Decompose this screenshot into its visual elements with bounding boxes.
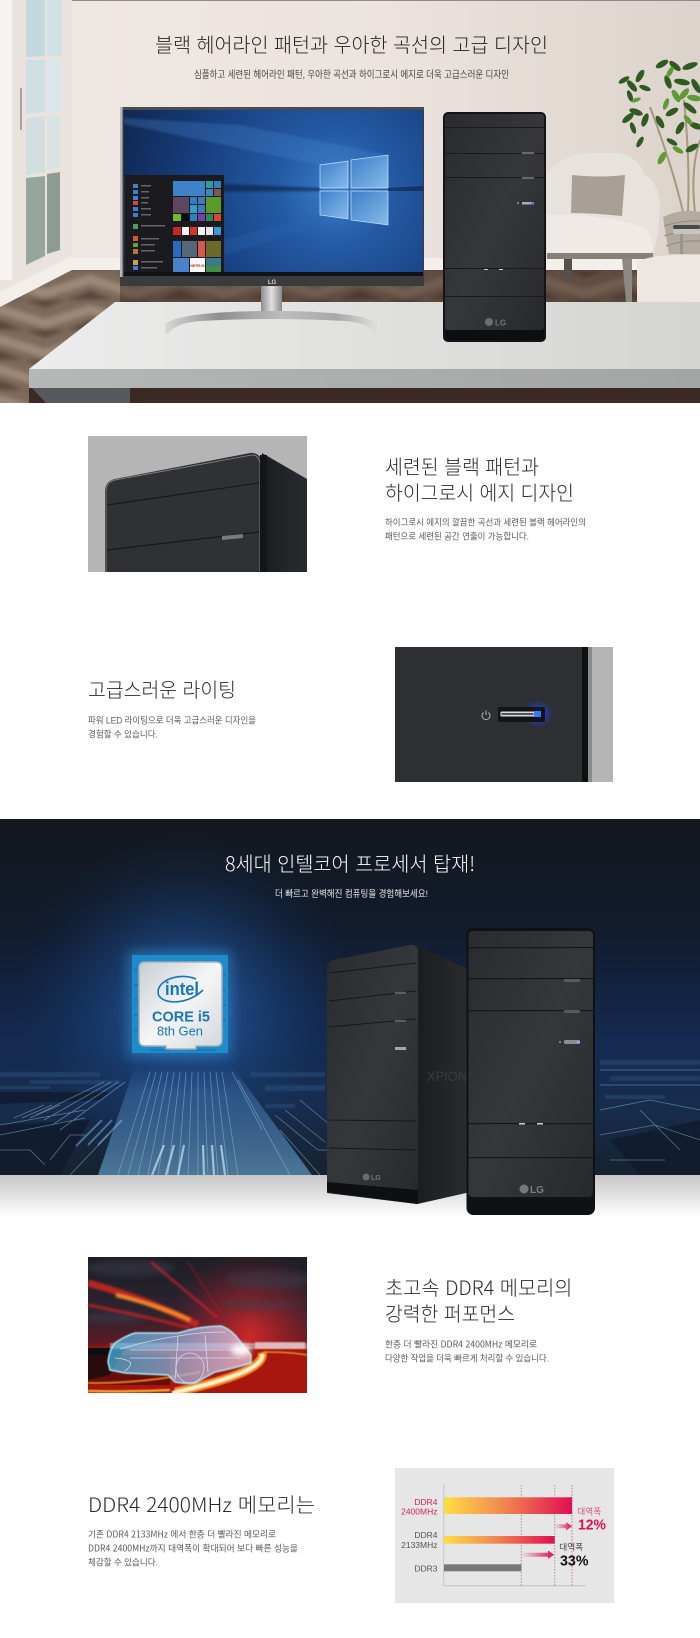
heading: DDR4 2400MHz 메모리는 xyxy=(88,1489,315,1518)
description xyxy=(88,716,256,740)
monitor screen xyxy=(124,110,424,276)
hero subtitle: 심플하고 세련된 헤어라인 패턴, 우아한 곡선과 하이그로시 에지로 더욱 고급스러운 디자인 xyxy=(194,68,509,81)
8th gen: 8th Gen xyxy=(157,1024,203,1038)
image: power LED close-up xyxy=(395,647,613,782)
panel: premium lighting xyxy=(88,647,613,782)
bar labels: 2133MHz xyxy=(401,1540,438,1550)
description: 체감할 수 있습니다. xyxy=(88,1556,158,1568)
description: 패턴으로 세련된 공간 연출이 가능합니다. xyxy=(385,530,529,542)
bar: DDR4 2133MHz xyxy=(444,1536,555,1544)
description: 기존 DDR4 2133MHz 에서 한층 더 빨라진 메모리로 xyxy=(88,1528,276,1540)
window xyxy=(0,0,72,307)
bar labels: 2400MHz xyxy=(401,1506,438,1516)
skyline lights xyxy=(110,1342,307,1349)
description xyxy=(88,1528,298,1568)
panel: DDR4 performance xyxy=(85,1250,572,1393)
bar labels: DDR3 xyxy=(414,1564,438,1574)
XPION side mark: XPION xyxy=(427,1068,467,1084)
LG logo: LG xyxy=(530,1185,544,1196)
panel: 8th gen intel section xyxy=(0,819,700,1217)
wooden floor xyxy=(0,270,637,403)
armchair xyxy=(547,153,660,302)
description: 다양한 작업을 더욱 빠르게 처리할 수 있습니다. xyxy=(385,1352,549,1364)
callout: 33 percent xyxy=(559,1542,588,1570)
image: light-trail car xyxy=(85,1250,315,1393)
hero title: 블랙 헤어라인 패턴과 우아한 곡선의 고급 디자인 xyxy=(155,34,548,57)
heading: 하이그로시 에지 디자인 xyxy=(385,482,574,505)
heading: 고급스러운 라이팅 xyxy=(88,679,236,702)
monitor LG logo: LG xyxy=(268,280,276,286)
taskbar xyxy=(124,272,423,276)
heading: 세련된 블랙 패턴과 xyxy=(385,456,539,479)
front tower xyxy=(466,928,595,1215)
callout: 33 percent: 33% xyxy=(560,1552,588,1570)
bar: DDR3 xyxy=(444,1564,521,1571)
heading: 강력한 퍼포먼스 xyxy=(385,1303,515,1326)
bar: DDR4 2400MHz xyxy=(444,1497,572,1514)
callout: 12 percent xyxy=(577,1506,606,1534)
dark circuit background xyxy=(0,819,700,1175)
bright traces xyxy=(152,1145,225,1175)
cushion xyxy=(571,175,625,216)
start menu xyxy=(125,175,224,272)
description: 경험할 수 있습니다. xyxy=(88,728,158,740)
LG logo xyxy=(520,1184,544,1196)
callout: 33 percent: 대역폭 xyxy=(559,1542,583,1552)
image: tower corner close-up xyxy=(88,436,307,572)
bar labels: DDR4 xyxy=(414,1497,438,1507)
heading: 초고속 DDR4 메모리의 xyxy=(385,1272,572,1301)
LED glow xyxy=(527,704,549,724)
LG logo xyxy=(362,1174,381,1182)
description: 파워 LED 라이팅으로 더욱 고급스러운 디자인을 xyxy=(88,716,256,726)
LED button xyxy=(498,707,545,722)
flower pot xyxy=(663,211,700,254)
wireframe car xyxy=(108,1326,251,1383)
monitor xyxy=(120,107,424,334)
dark corners xyxy=(0,1092,700,1160)
product tower xyxy=(443,112,546,342)
table xyxy=(29,302,700,403)
LG logo xyxy=(485,318,506,326)
bar labels xyxy=(401,1497,438,1574)
panel: black pattern design xyxy=(88,436,586,572)
core i5: CORE i5 xyxy=(152,1008,210,1026)
intel badge xyxy=(128,951,231,1057)
baseboard xyxy=(72,258,700,270)
heading xyxy=(385,456,574,505)
bar chart xyxy=(395,1468,614,1603)
clouds xyxy=(85,1260,315,1324)
road shading xyxy=(88,1348,307,1393)
rear angled tower xyxy=(327,945,470,1204)
intel logo: intel xyxy=(165,979,199,999)
arrow: 33 percent xyxy=(521,1550,554,1559)
road light streaks xyxy=(88,1352,307,1393)
panel: DDR4 2400MHz memory xyxy=(88,1468,614,1603)
heading: 8세대 인텔코어 프로세서 탑재! xyxy=(225,848,475,877)
description: 한층 더 빨라진 DDR4 2400MHz 메모리로 xyxy=(385,1338,537,1350)
handle xyxy=(222,534,243,540)
subheading: 더 빠르고 완벽해진 컴퓨팅을 경험해보세요! xyxy=(275,888,428,900)
description xyxy=(385,1338,549,1364)
panel: hero room scene xyxy=(0,0,700,412)
callout: 12 percent: 12% xyxy=(578,1516,606,1534)
heading xyxy=(385,1272,572,1326)
circuit traces xyxy=(0,1070,700,1175)
side circuit bands xyxy=(0,1060,700,1108)
light beams xyxy=(88,1262,222,1328)
LG logo: LG xyxy=(371,1175,381,1182)
ottoman xyxy=(637,255,700,303)
side table xyxy=(673,225,700,254)
bar labels: DDR4 xyxy=(414,1530,438,1540)
axes xyxy=(444,1485,586,1586)
callout: 12 percent: 대역폭 xyxy=(577,1506,601,1516)
arrow: 12 percent xyxy=(555,1522,572,1531)
LG logo: LG xyxy=(495,318,506,328)
power icon xyxy=(482,710,490,720)
description: DDR4 2400MHz까지 대역폭이 확대되어 보다 빠른 성능을 xyxy=(88,1542,298,1554)
description: 하이그로시 에지의 깔끔한 곡선과 세련된 블랙 헤어라인의 xyxy=(385,516,586,528)
gradient floor xyxy=(0,1175,700,1217)
monitor stand xyxy=(165,286,379,334)
netflix tile label: NETFLIX xyxy=(190,264,205,268)
windows logo xyxy=(320,155,388,225)
central light path xyxy=(98,1066,312,1175)
description xyxy=(385,516,586,542)
plant xyxy=(618,58,700,212)
